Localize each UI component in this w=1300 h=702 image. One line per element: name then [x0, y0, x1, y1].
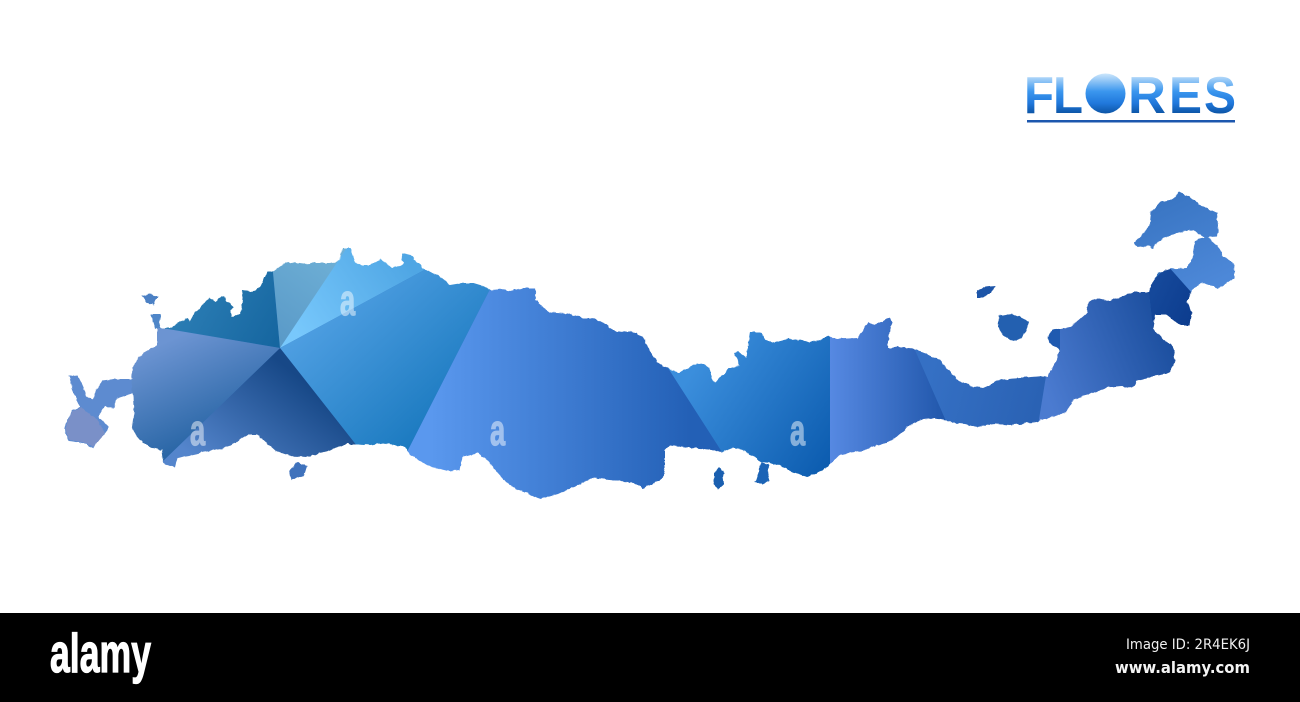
facet: Adonara island	[1134, 192, 1187, 249]
facet: central large blue	[408, 288, 722, 499]
islet: south of west coast	[289, 462, 307, 480]
watermark a, east: a	[790, 405, 806, 455]
islet: north-west point	[150, 314, 161, 328]
islet: south bay drop	[755, 462, 770, 485]
facet: north light teal	[272, 248, 346, 348]
islets around the main island	[64, 286, 1029, 489]
facet: centre-west blue	[280, 270, 490, 450]
islet: Komodo south tone	[65, 408, 105, 447]
islet: south bay round	[713, 467, 724, 489]
facet: eastern headland	[1038, 292, 1176, 422]
underlay filling facet seams	[162, 268, 1192, 462]
watermark a, west: a	[190, 405, 206, 455]
islet: north small	[977, 286, 995, 297]
letter L: L	[1053, 67, 1083, 125]
alamy logo: alamy	[50, 622, 151, 684]
footer background	[0, 613, 1300, 702]
facet: north bright blue	[280, 248, 425, 348]
facet: south dark blue	[163, 348, 356, 468]
watermark a, north-west: a	[340, 275, 356, 325]
letter O as solid circle	[1086, 74, 1126, 114]
letter F: F	[1024, 67, 1054, 125]
island facets, masked to the coastline	[120, 185, 1250, 510]
islet: western Komodo group	[64, 375, 134, 448]
facet: eastern strip	[983, 376, 1046, 426]
islet: north round	[998, 314, 1029, 341]
title underline	[1027, 120, 1235, 122]
watermark letters	[190, 275, 806, 455]
footer bar	[0, 613, 1300, 702]
islet: north-west rock	[142, 294, 158, 305]
letter E: E	[1169, 67, 1202, 125]
letter R: R	[1128, 67, 1166, 125]
image ID: Image ID: 2R4EK6J	[1126, 637, 1250, 653]
website: www.alamy.com	[1115, 658, 1250, 677]
watermark a, centre: a	[490, 405, 506, 455]
letter S: S	[1204, 67, 1236, 125]
facet: north-west dark teal	[165, 272, 280, 348]
facet: dark north-east	[1149, 268, 1192, 326]
facet: east coast wedge	[1048, 329, 1060, 353]
facet: far west	[131, 328, 280, 461]
title: FLORES	[1024, 67, 1236, 125]
map: Flores island	[64, 185, 1250, 510]
facet: central-east blue	[668, 332, 830, 477]
facet: far north-east peninsula	[1170, 198, 1235, 292]
facet: eastern panel	[830, 318, 946, 464]
